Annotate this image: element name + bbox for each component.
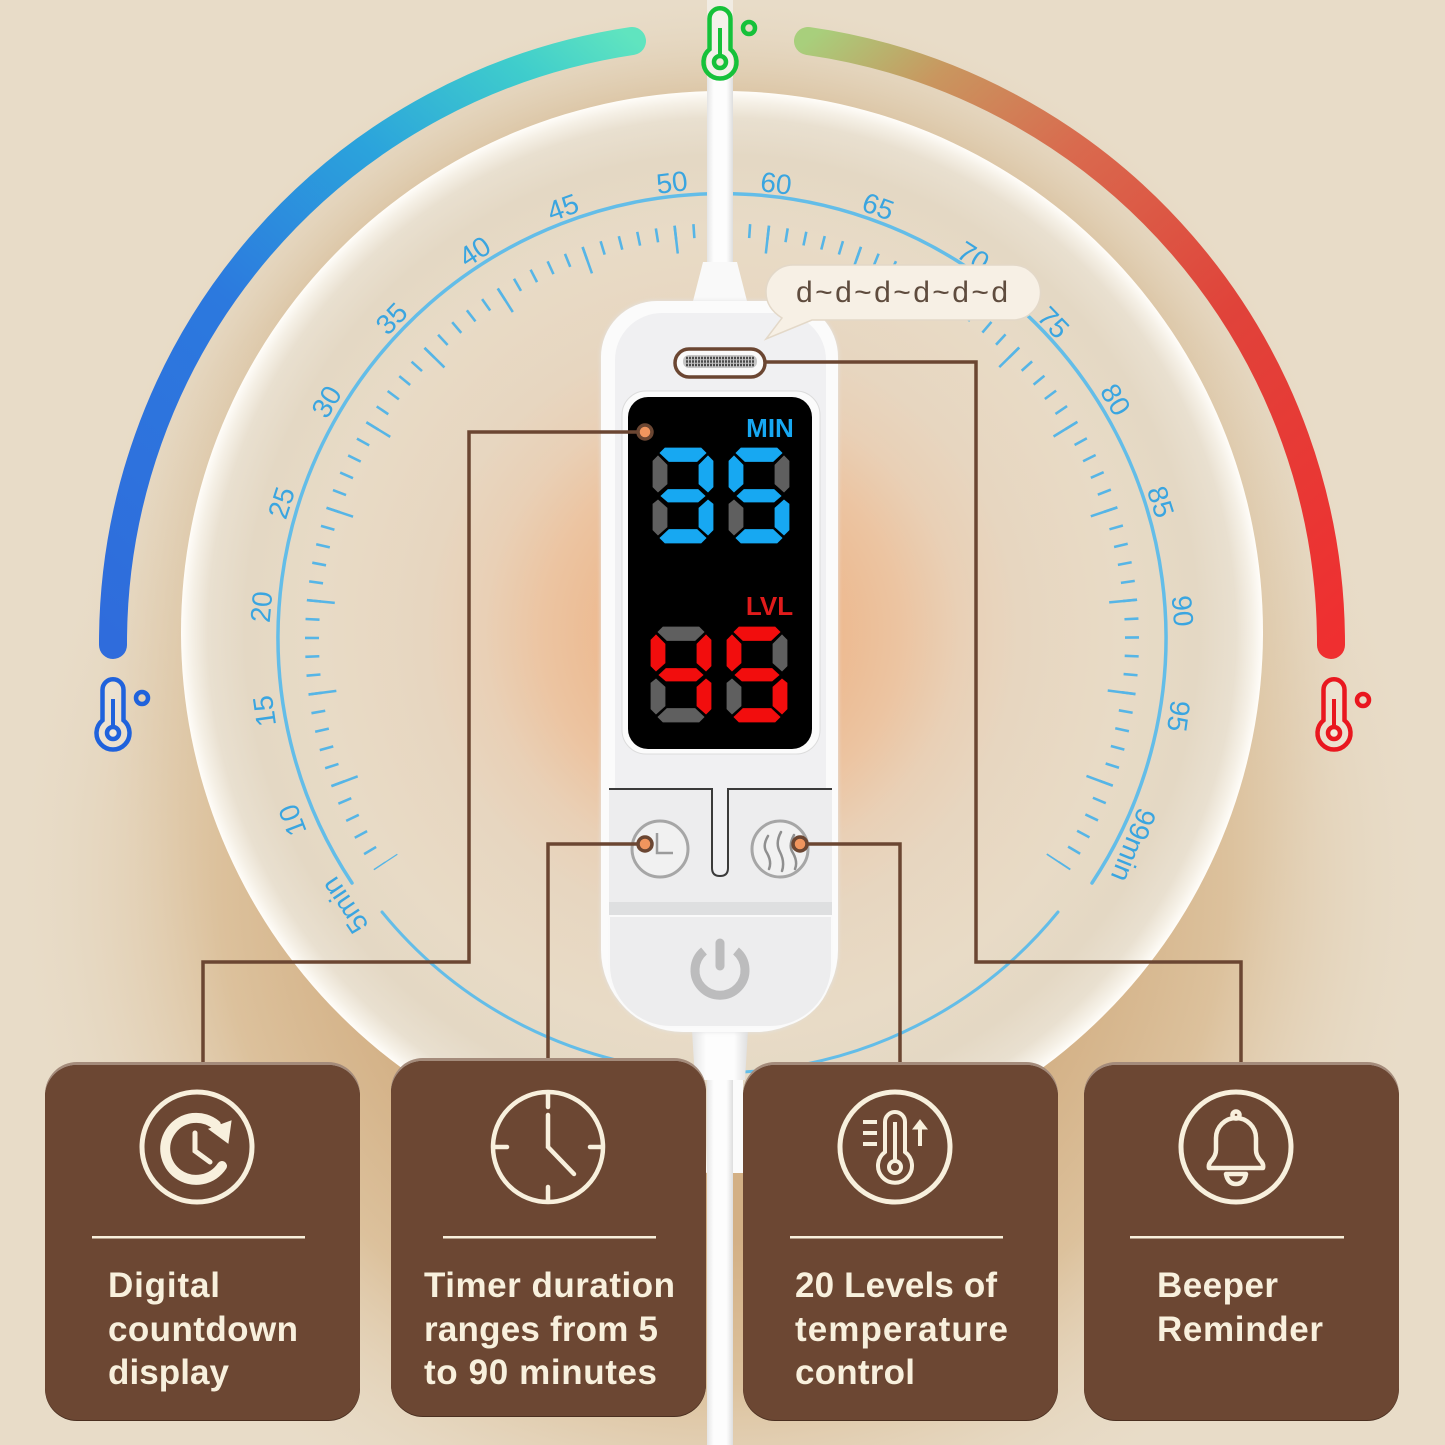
dial labels: 15 bbox=[247, 693, 282, 729]
timer panel bbox=[609, 789, 832, 903]
card text: display bbox=[108, 1353, 230, 1392]
dial labels: 75 bbox=[1031, 301, 1075, 345]
dial labels: 35 bbox=[370, 297, 414, 341]
card text: control bbox=[795, 1353, 915, 1392]
dial labels: 25 bbox=[262, 483, 301, 522]
card text: 20 Levels of bbox=[795, 1266, 997, 1305]
card text: Reminder bbox=[1157, 1310, 1323, 1349]
card: temperature levels bbox=[743, 1062, 1058, 1421]
card text: temperature bbox=[795, 1310, 1008, 1349]
icon: clock bbox=[493, 1092, 603, 1202]
dial labels: 20 bbox=[245, 590, 278, 624]
power button panel bbox=[609, 916, 832, 1027]
dial labels: 85 bbox=[1141, 482, 1180, 521]
card text: Timer duration bbox=[424, 1266, 675, 1305]
dial labels: 60 bbox=[759, 166, 793, 201]
card: digital countdown display bbox=[45, 1062, 360, 1421]
card text: ranges from 5 bbox=[424, 1310, 658, 1349]
MIN label: MIN bbox=[746, 413, 794, 443]
warm-to-hot gradient arc bbox=[808, 41, 1331, 645]
card: timer duration bbox=[391, 1058, 706, 1417]
speech bubble: beep sound: d~d~d~d~d~d bbox=[796, 276, 1008, 309]
dial labels: 5min bbox=[315, 871, 374, 939]
timer dial scale bbox=[278, 194, 1166, 1073]
dial labels: 40 bbox=[453, 230, 496, 273]
card text bbox=[424, 1266, 675, 1392]
display screen bbox=[622, 391, 820, 754]
controller body bbox=[601, 301, 838, 1032]
card text: countdown bbox=[108, 1310, 298, 1349]
card: beeper reminder bbox=[1084, 1062, 1399, 1421]
icon: countdown clock bbox=[142, 1092, 252, 1202]
callout lines bbox=[203, 362, 1241, 1064]
dial labels: 50 bbox=[655, 165, 689, 200]
dial labels: 95 bbox=[1161, 698, 1196, 734]
cold-to-warm gradient arc bbox=[113, 41, 632, 645]
card text bbox=[795, 1266, 1008, 1392]
icon: cold thermometer bbox=[96, 679, 148, 750]
dial labels: 99min bbox=[1105, 804, 1162, 886]
card text: Digital bbox=[108, 1266, 220, 1305]
power icon bbox=[695, 943, 745, 995]
speaker grille bbox=[675, 349, 765, 377]
dial labels: 70 bbox=[952, 235, 995, 278]
speech bubble: beep sound bbox=[766, 265, 1040, 339]
dial labels: 65 bbox=[858, 187, 898, 226]
power cord bottom bbox=[692, 1030, 748, 1445]
card text: to 90 minutes bbox=[424, 1353, 657, 1392]
dial labels: 80 bbox=[1094, 378, 1137, 421]
icon: bell bbox=[1181, 1092, 1291, 1202]
digits: level 45 bbox=[651, 627, 787, 722]
dial labels: 30 bbox=[305, 380, 348, 423]
heat button bbox=[752, 821, 808, 877]
digits: minutes 35 bbox=[653, 448, 789, 543]
dial labels: 90 bbox=[1166, 594, 1199, 628]
divider strip bbox=[609, 902, 832, 916]
dial labels: 10 bbox=[272, 800, 313, 840]
card text: Beeper bbox=[1157, 1266, 1278, 1305]
icon: hot thermometer bbox=[1317, 679, 1369, 750]
dial labels bbox=[245, 165, 1199, 939]
dial labels: 45 bbox=[543, 188, 583, 227]
power cord top bbox=[692, 0, 748, 305]
timer button bbox=[632, 821, 688, 877]
LVL label: LVL bbox=[746, 591, 793, 621]
icon: thermometer levels bbox=[840, 1092, 950, 1202]
card text bbox=[108, 1266, 298, 1392]
inner face bbox=[615, 313, 826, 1022]
glowing white disc bbox=[181, 91, 1263, 1173]
callout dots bbox=[638, 425, 807, 851]
icon: comfort thermometer bbox=[704, 8, 755, 79]
card text bbox=[1157, 1266, 1323, 1349]
